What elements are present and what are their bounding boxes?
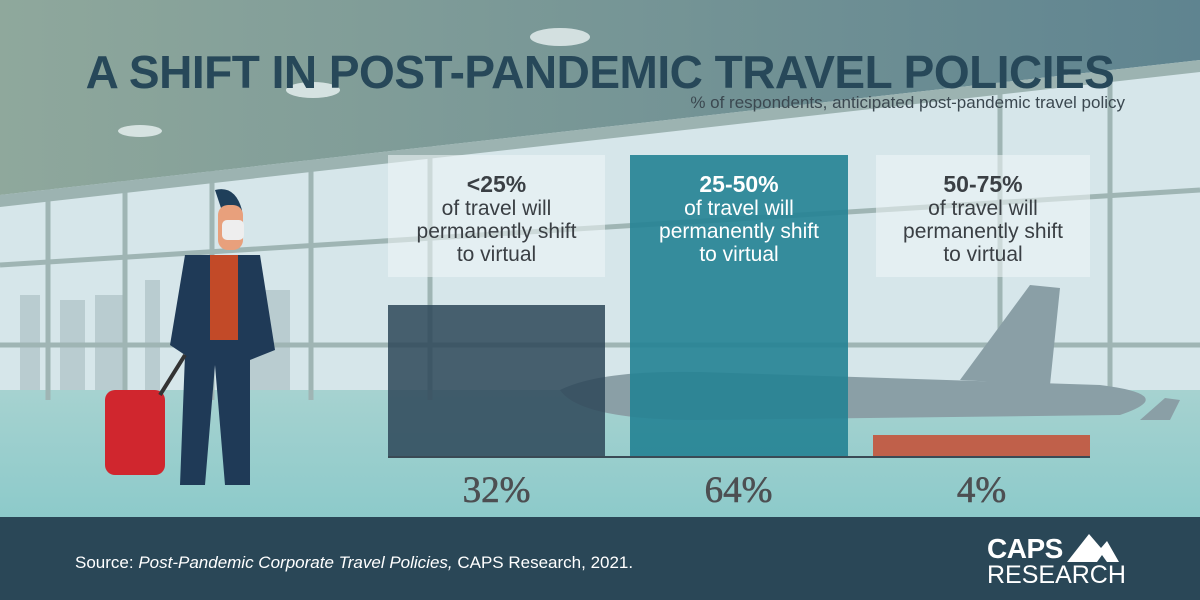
label: 25-50%: to virtual <box>699 243 779 266</box>
bar: <25% <box>388 305 605 457</box>
label: 25-50%: permanently shift <box>659 220 819 243</box>
source text: Source: Post-Pandemic Corporate Travel Policies, CAPS Research, 2021. <box>75 553 633 572</box>
logo: CAPS Research: RESEARCH <box>987 561 1126 589</box>
subtitle: % of respondents, anticipated post-pandemic travel policy <box>690 93 1125 112</box>
label box: 50-75% <box>876 155 1090 277</box>
title: A SHIFT IN POST-PANDEMIC TRAVEL POLICIES <box>86 46 1114 98</box>
label box: <25%: permanently shift <box>417 220 576 243</box>
label box: 50-75%: permanently shift <box>903 220 1063 243</box>
label box: 50-75%: of travel will <box>928 197 1038 220</box>
label: 25-50%: of travel will <box>684 197 794 220</box>
logo: CAPS Research <box>987 533 1126 589</box>
bar: 50-75% <box>873 435 1090 457</box>
label box: <25%: to virtual <box>457 243 536 266</box>
icon: traveller <box>105 189 275 485</box>
label box: <25%: <25% <box>467 171 526 197</box>
logo: CAPS Research: CAPS <box>987 533 1063 564</box>
bar: 25-50% <box>630 155 848 457</box>
value: 32%: 32% <box>463 470 530 511</box>
label box: 50-75%: to virtual <box>943 243 1023 266</box>
label: 25-50% <box>659 171 819 266</box>
label: 25-50%: 25-50% <box>699 171 779 197</box>
value: 64%: 64% <box>705 470 772 511</box>
baseline <box>388 456 1090 458</box>
value: 4%: 4% <box>957 470 1006 511</box>
label box: <25%: of travel will <box>442 197 551 220</box>
label box: 50-75%: 50-75% <box>943 171 1023 197</box>
label box: <25% <box>388 155 605 277</box>
